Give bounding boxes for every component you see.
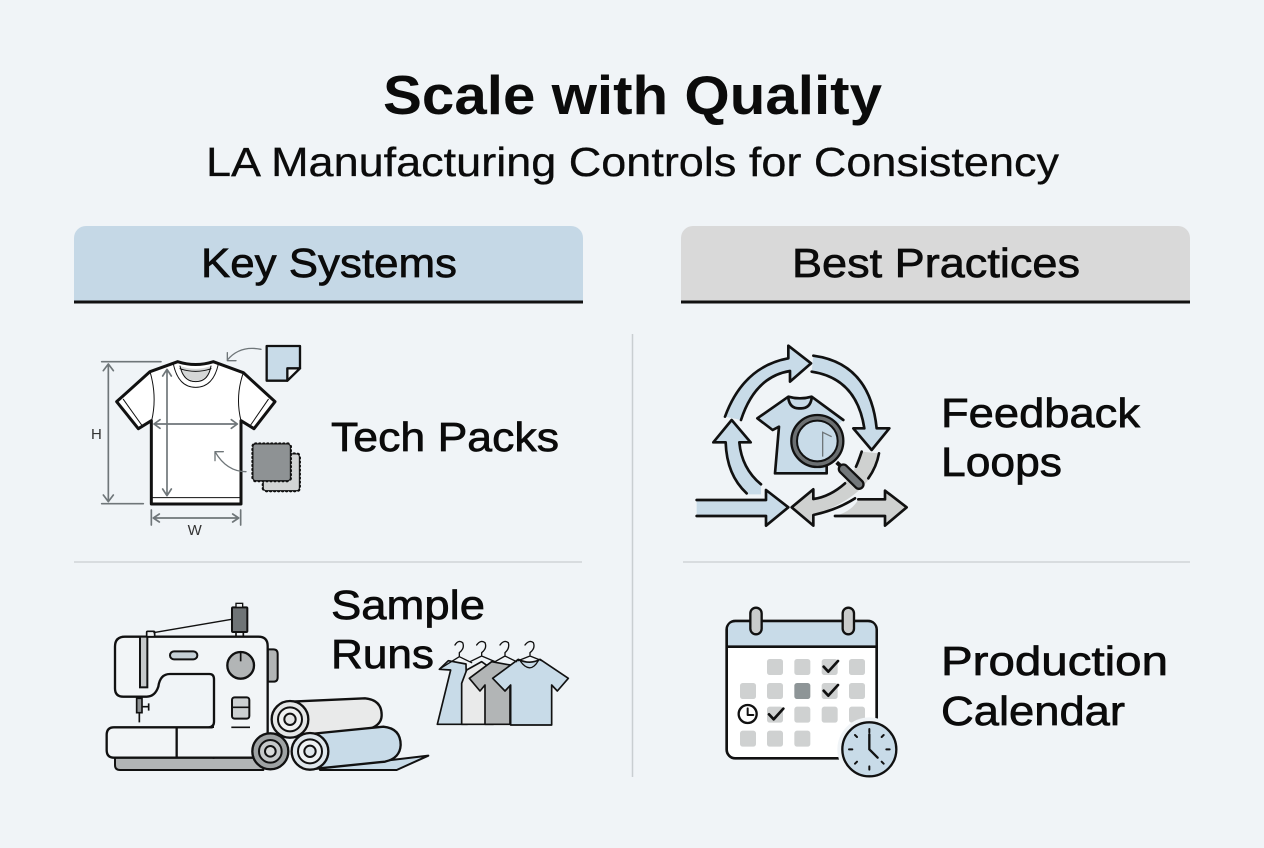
arrow: lower gray arc [792,452,879,526]
icon: production calendar [727,608,901,781]
label: Production Calendar [941,638,1168,734]
arrow: top right arc [812,356,889,450]
title: Scale with Quality [383,64,882,126]
label: Feedback Loops [941,390,1141,485]
panel header: Key Systems [74,226,583,302]
panel header: Key Systems: Key Systems [201,240,457,286]
label: Sample Runs [331,582,485,677]
dimension label H: H [91,426,102,443]
dimension label W: W [188,522,203,539]
panel header: Best Practices: Best Practices [792,240,1080,286]
arrow: left arc [713,420,761,494]
label: Tech Packs: Tech Packs [331,414,559,460]
label: Feedback Loops: Feedback [941,390,1141,436]
large clock [837,717,901,781]
check marks [769,661,838,719]
machine body [115,603,278,758]
icon: shirt under inspection [757,397,843,473]
hanging sample garments [437,641,568,725]
label: Sample Runs: Sample [331,582,485,628]
icon: spec sheet [267,346,300,381]
icon: sewing machine and fabric rolls [107,603,568,770]
label: Production Calendar: Calendar [941,688,1125,734]
panel header: Best Practices [681,226,1190,302]
label: Sample Runs: Runs [331,631,434,677]
icon: fabric swatches [253,444,299,491]
fabric rolls [252,698,428,770]
small clock [739,705,757,723]
calendar page [727,608,877,758]
icon: magnifying glass [791,415,859,484]
calendar day grid [740,659,865,747]
machine base [107,727,263,770]
label: Feedback Loops: Loops [941,439,1062,485]
arrow: top left arc [725,346,811,420]
icon: t-shirt tech pack [91,346,300,539]
subtitle: LA Manufacturing Controls for Consistency [206,139,1060,185]
icon: feedback loops [697,346,907,526]
arrow: gray straight [835,491,907,526]
arrow: blue straight [697,490,788,526]
label: Production Calendar: Production [941,638,1168,684]
